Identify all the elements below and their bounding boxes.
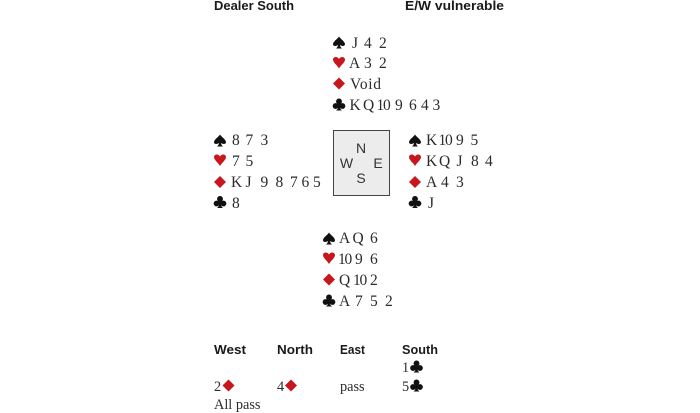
panel: south hand — [323, 230, 393, 310]
panel: south hand: 2 — [370, 272, 378, 289]
panel: west hand — [214, 132, 321, 212]
panel: north hand: 2 — [379, 55, 387, 72]
panel: bidding table: West — [214, 342, 247, 357]
panel: west hand: 7 — [246, 132, 254, 149]
panel: south hand: 7 — [355, 293, 363, 310]
panel: east hand: 4 — [441, 174, 449, 191]
panel: south hand: 10 — [353, 272, 368, 289]
panel: bidding table: All pass — [214, 397, 261, 413]
compass box: W — [340, 155, 354, 171]
panel: bidding table: East — [340, 342, 366, 357]
panel: bidding table: 1 — [402, 360, 409, 376]
panel: north hand: J — [352, 35, 358, 52]
panel: west hand: J — [246, 174, 252, 191]
panel: north hand: 4 — [364, 35, 372, 52]
panel: north hand: Q — [363, 97, 374, 114]
panel: north hand: K — [350, 97, 362, 114]
panel: south hand: Q — [352, 230, 364, 247]
panel: west hand: 8 — [232, 132, 240, 149]
panel: east hand: 10 — [438, 132, 453, 149]
panel: bidding table: 5 — [402, 379, 409, 395]
panel: north hand: 3 — [432, 97, 440, 114]
panel: east hand: J — [456, 153, 463, 170]
panel: east hand — [409, 132, 493, 212]
panel: east hand: 3 — [456, 174, 464, 191]
panel: north hand: 2 — [379, 35, 387, 52]
panel: west hand: 7 — [290, 174, 298, 191]
panel: east hand: 4 — [485, 153, 493, 170]
panel: north hand: Void — [350, 76, 381, 93]
panel: west hand: 5 — [246, 153, 254, 170]
panel: south hand: 5 — [370, 293, 378, 310]
compass box: N — [356, 140, 366, 156]
panel: north hand: 3 — [364, 55, 372, 72]
panel: east hand: Q — [439, 153, 450, 170]
panel: west hand: K — [231, 174, 243, 191]
panel: east hand: K — [426, 153, 438, 170]
panel: south hand: 9 — [355, 251, 363, 268]
panel: south hand: 10 — [338, 251, 353, 268]
panel: north hand — [333, 35, 440, 114]
panel: north hand: 10 — [376, 97, 391, 114]
panel: bidding table: South — [402, 342, 438, 357]
panel: west hand: 6 — [302, 174, 310, 191]
panel: north hand: 6 — [409, 97, 417, 114]
panel: bidding table: 2 — [214, 379, 221, 395]
panel: bidding table: pass — [340, 379, 365, 395]
panel: bidding table: 4 — [277, 379, 284, 395]
compass box: S — [356, 170, 366, 186]
panel: west hand: 7 — [232, 153, 240, 170]
panel: north hand: A — [349, 55, 361, 72]
panel: east hand: 8 — [471, 153, 479, 170]
panel: south hand: 6 — [370, 230, 378, 247]
panel: south hand: 6 — [370, 251, 378, 268]
panel: north hand: 4 — [421, 97, 429, 114]
compass box — [334, 130, 390, 196]
panel: west hand: 5 — [313, 174, 321, 191]
panel: east hand: J — [428, 195, 434, 212]
panel: bidding table: North — [277, 342, 313, 357]
compass box: E — [373, 155, 383, 171]
panel: south hand: Q — [339, 272, 350, 289]
panel: west hand: 8 — [232, 195, 240, 212]
panel: north hand: 9 — [395, 97, 403, 114]
panel: east hand: K — [426, 132, 438, 149]
panel: west hand: 9 — [260, 174, 268, 191]
panel: south hand: A — [339, 293, 351, 310]
panel: west hand: 3 — [260, 132, 268, 149]
panel: south hand: A — [339, 230, 351, 247]
panel: west hand: 8 — [276, 174, 284, 191]
panel: east hand: A — [426, 174, 438, 191]
panel: east hand: 5 — [470, 132, 478, 149]
panel: bidding table — [214, 342, 438, 413]
panel: south hand: 2 — [385, 293, 393, 310]
panel: east hand: 9 — [456, 132, 464, 149]
